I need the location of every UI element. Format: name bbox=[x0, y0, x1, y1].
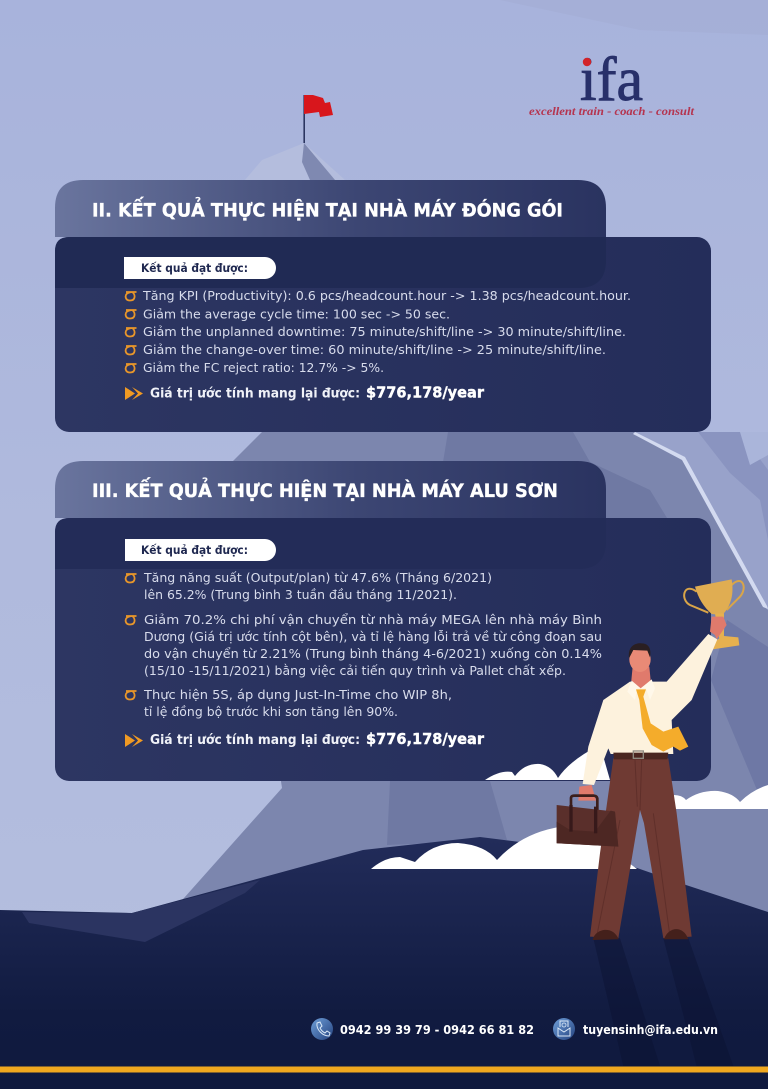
bullet list: Giảm 70.2% chi phí vận chuyển từ nhà máy MEGA lên nhà máy Bình bbox=[144, 612, 602, 627]
bullet list: tỉ lệ đồng bộ trước khi sơn tăng lên 90%. bbox=[144, 704, 398, 719]
section III title tab bbox=[55, 461, 606, 518]
businessman holding trophy bbox=[557, 579, 744, 1066]
hands bbox=[710, 617, 727, 639]
collar bbox=[627, 679, 655, 700]
bullet list: lên 65.2% (Trung bình 3 tuần đầu tháng 11/2021). bbox=[144, 587, 457, 602]
foreground hill bbox=[0, 837, 768, 1089]
bullet list: Giảm the average cycle time: 100 sec -> 50 sec. bbox=[143, 306, 450, 321]
bullet list: Giảm the change-over time: 60 minute/shift/line -> 25 minute/shift/line. bbox=[143, 342, 606, 357]
logo: ifa: excellent train - coach - consult bbox=[529, 106, 695, 118]
bullet list: Tăng năng suất (Output/plan) từ 47.6% (Tháng 6/2021) bbox=[143, 570, 492, 585]
bullet list: Giảm the unplanned downtime: 75 minute/shift/line -> 30 minute/shift/line. bbox=[143, 324, 626, 339]
label pill bbox=[125, 539, 276, 561]
section III heading: III. KẾT QUẢ THỰC HIỆN TẠI NHÀ MÁY ALU SƠN bbox=[92, 478, 558, 502]
bullet list: Thực hiện 5S, áp dụng Just-In-Time cho WIP 8h, bbox=[143, 687, 452, 702]
bullet list: Tăng KPI (Productivity): 0.6 pcs/headcount.hour -> 1.38 pcs/headcount.hour. bbox=[142, 288, 631, 303]
shoes bbox=[593, 929, 688, 940]
foot shadows bbox=[593, 938, 733, 1066]
section II title tab bbox=[55, 180, 606, 237]
footer stripe bbox=[0, 1066, 768, 1072]
bullet list bbox=[126, 570, 602, 719]
panel: results at ALU painting factory bbox=[55, 461, 711, 781]
label pill bbox=[124, 257, 276, 279]
belt bbox=[613, 753, 668, 759]
trophy bbox=[684, 579, 744, 650]
logo: ifa: ifa bbox=[580, 46, 643, 114]
section II body card bbox=[55, 237, 711, 432]
logo: ifa bbox=[529, 46, 695, 118]
flag on the summit bbox=[302, 95, 335, 180]
icon: phone bbox=[311, 1018, 333, 1040]
bullet list: do vận chuyển từ 2.21% (Trung bình tháng 4-6/2021) xuống còn 0.14% bbox=[144, 646, 602, 661]
icon: email bbox=[553, 1018, 575, 1040]
estimated value line bbox=[125, 384, 485, 402]
tie bbox=[636, 689, 688, 752]
email address: tuyensinh@ifa.edu.vn bbox=[583, 1022, 718, 1037]
label pill: Kết quả đạt được: bbox=[141, 543, 248, 557]
phone numbers: 0942 99 39 79 - 0942 66 81 82 bbox=[340, 1022, 534, 1037]
footer contact bbox=[0, 1018, 768, 1072]
clouds bbox=[371, 745, 768, 869]
bullet list: Giảm the FC reject ratio: 12.7% -> 5%. bbox=[143, 360, 384, 375]
arm and shirt bbox=[583, 634, 717, 785]
estimated value line: Giá trị ước tính mang lại được: bbox=[150, 733, 360, 748]
estimated value line: $776,178/year bbox=[366, 730, 485, 748]
briefcase bbox=[557, 796, 618, 847]
neck and head bbox=[631, 667, 651, 688]
estimated value line: Giá trị ước tính mang lại được: bbox=[150, 386, 360, 402]
estimated value line: $776,178/year bbox=[366, 384, 485, 402]
bullet list: Dương (Giá trị ước tính cột bên), và tỉ lệ hàng lỗi trả về từ công đoạn sau bbox=[144, 629, 602, 644]
bullet list: (15/10 -15/11/2021) bằng việc cải tiến quy trình và Pallet chất xếp. bbox=[144, 663, 566, 678]
label pill: Kết quả đạt được: bbox=[141, 261, 248, 275]
estimated value line bbox=[125, 730, 485, 748]
pants bbox=[590, 758, 692, 938]
section III body card bbox=[55, 518, 711, 781]
bullet list bbox=[126, 288, 631, 375]
panel: results at packaging factory bbox=[55, 180, 711, 432]
section II heading: II. KẾT QUẢ THỰC HIỆN TẠI NHÀ MÁY ĐÓNG GÓI bbox=[92, 198, 563, 222]
